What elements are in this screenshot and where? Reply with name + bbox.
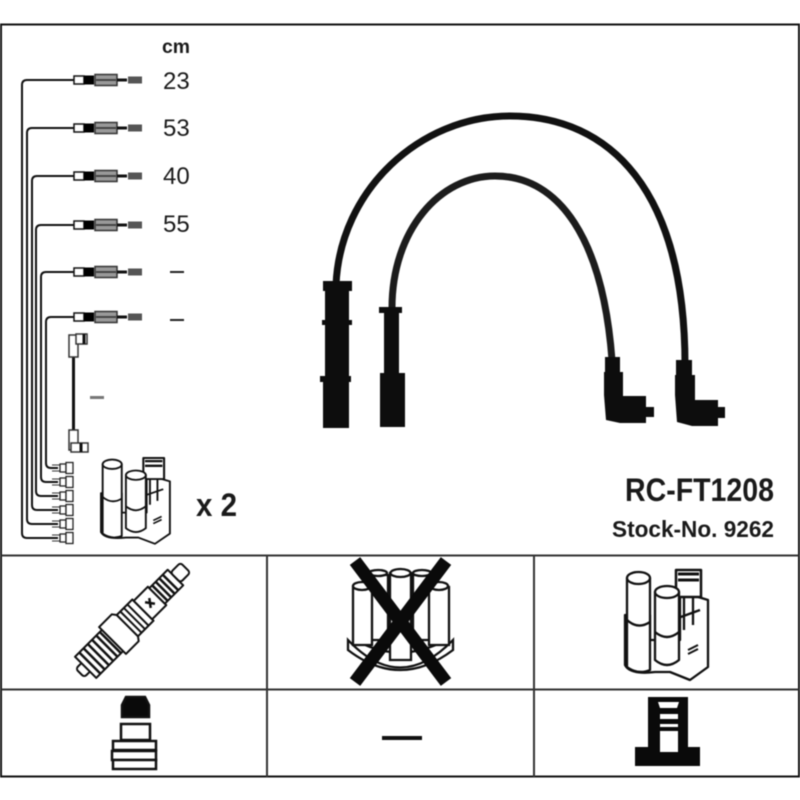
small coil icon (101, 458, 170, 544)
multiplier: x 2 (196, 487, 237, 523)
boot B (379, 307, 405, 427)
length values: 55 (163, 211, 190, 238)
icon: black terminal (635, 697, 700, 766)
product photo: ignition cables (320, 116, 725, 428)
connector 55 (74, 220, 142, 230)
cable long (336, 116, 685, 365)
boot A (320, 281, 352, 428)
length values: 23 (163, 68, 190, 95)
icon: spark plug (67, 554, 199, 686)
short jumper cable (69, 334, 88, 452)
length values: 40 (163, 163, 190, 190)
length values: 53 (163, 115, 190, 142)
column heading: cm: cm (162, 37, 190, 58)
angled boot C (604, 357, 654, 423)
icon: plug connector (112, 697, 156, 769)
angled boot D (675, 360, 725, 426)
icon: distributor cap crossed out (348, 561, 453, 682)
length values (163, 68, 190, 321)
dash: no value (382, 736, 422, 740)
connector 40 (74, 170, 142, 182)
connector 5 (74, 266, 142, 278)
cross (355, 561, 446, 682)
connector 6 (74, 312, 142, 322)
cable short (392, 176, 612, 360)
connector 23 (74, 74, 142, 86)
connector 53 (74, 122, 142, 134)
stock number: Stock-No. 9262 (612, 516, 774, 542)
wire harness diagram (22, 74, 142, 544)
jumper length dash (90, 396, 104, 399)
product code: RC-FT1208 (625, 472, 774, 508)
icon: ignition coil (625, 570, 708, 680)
